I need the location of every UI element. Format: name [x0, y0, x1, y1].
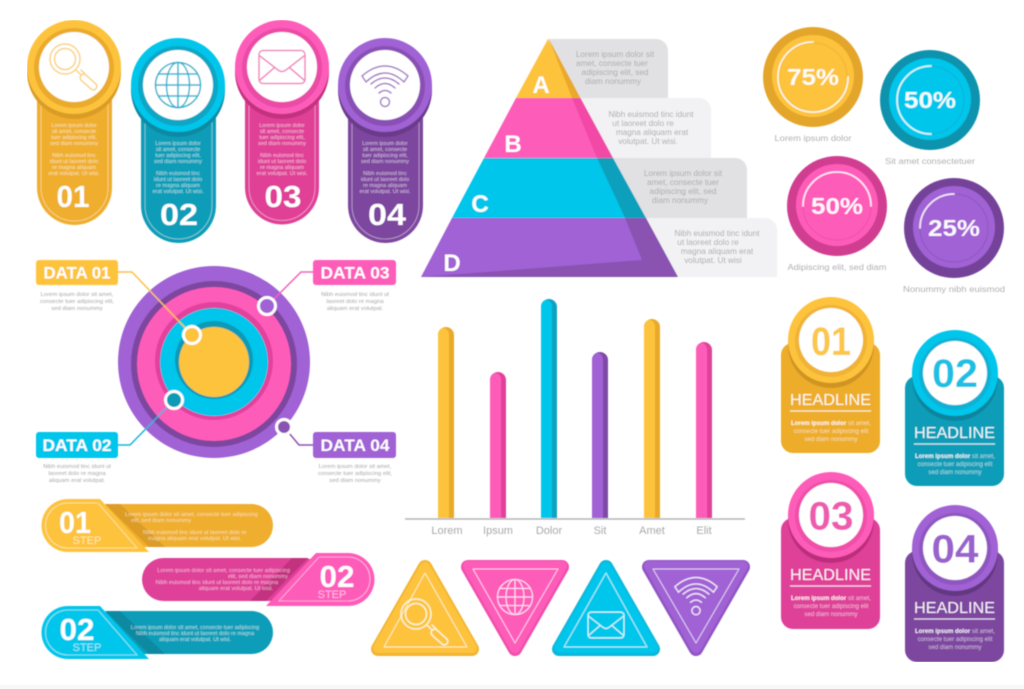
triangle: wifi: [649, 566, 743, 649]
callout: data 03: laoreet dolo re magna: [326, 299, 384, 305]
pill 01 text: tuer adipiscing elit,: [51, 135, 97, 141]
step 03 banner: [41, 606, 273, 659]
pill 01 text: idunt ut laoreet dolo: [50, 159, 98, 165]
pyramid text: amet, consecte tuer: [647, 178, 719, 187]
callout: data 01: [36, 260, 200, 344]
bar dolor: [541, 299, 557, 518]
gauge 50% pink: [787, 156, 887, 256]
card 03: Lorem ipsum dolor sit amet,: [791, 595, 871, 602]
pill 04 text: sed diam nonummy: [361, 159, 409, 165]
card 01: consecte tuer adipiscing elit: [794, 428, 869, 435]
callout: data 02: laoreet dolo re magna: [48, 471, 106, 477]
card 03: sed diam nonummy: [804, 611, 859, 618]
card 04: sed diam nonummy: [928, 644, 983, 651]
axis labels: [431, 525, 712, 537]
step 03 banner: aliquam erat volutpat. Ut wisi.: [159, 637, 231, 643]
step 01 banner: [41, 499, 273, 552]
callout: data 01: DATA 01: [44, 264, 110, 282]
card 01: 01: [811, 320, 851, 364]
callout: data 01: sed diam nonummy: [51, 306, 103, 312]
step 01 banner: 01: [59, 505, 91, 540]
pill 02 text: Nibh euismod tinc: [156, 171, 200, 177]
pill 01: [27, 20, 121, 225]
pill 02 text: sed diam nonummy: [154, 159, 202, 165]
gauge 25%: [904, 178, 1004, 278]
pill 02: [131, 38, 225, 243]
pill 01 text: Lorem ipsum dolor: [51, 123, 97, 129]
pyramid letters: [443, 72, 550, 277]
pyramid text: ut laoreet dolo re: [677, 238, 739, 247]
card 03: HEADLINE: [790, 567, 871, 584]
pill 01 number: 01: [56, 179, 90, 214]
bar ipsum: [490, 372, 506, 518]
card 04: HEADLINE: [914, 600, 995, 617]
pill 03 text: sit amet, consecte: [260, 129, 304, 135]
gauge 50% cyan label: Sit amet consectetuer: [885, 157, 975, 166]
step 01 banner: elit, sed diam nonummy: [131, 518, 191, 524]
pyramid letters: C: [471, 191, 489, 218]
pill 02 text: idunt ut laoreet dolo: [154, 177, 202, 183]
callout: data 04: consecte tuer adipiscing elit,: [318, 471, 392, 477]
triangle: search: [378, 567, 472, 649]
axis: [405, 518, 745, 520]
card 04: [905, 505, 1004, 662]
panel: pyramid: [421, 39, 777, 277]
pill 03: [235, 20, 329, 225]
callout: data 04: Lorem ipsum dolor sit amet,: [319, 464, 392, 470]
callout: data 02: [36, 392, 182, 484]
triangle: envelope: [559, 567, 653, 649]
concentric rings: [118, 266, 310, 458]
pill 04 text: Lorem ipsum dolor: [362, 141, 408, 147]
card 01: Lorem ipsum dolor sit amet,: [791, 420, 871, 427]
pyramid text: adipiscing elit, sed: [650, 187, 717, 196]
callout: data 04: sed diam nonummy: [329, 478, 381, 484]
callout: data 03: Nibh euismod tinc idunt ut: [321, 292, 389, 298]
callout: data 03: aliquam erat volutpat.: [327, 306, 384, 312]
pyramid letters: D: [443, 250, 461, 277]
step 03 banner: Nibh euismod tinc idunt ut laoreet dolo re magna: [136, 631, 255, 637]
pill 02 text: sit amet, consecte: [156, 147, 200, 153]
icon: envelope: [259, 50, 305, 84]
pyramid text: amet, consecte tuer: [576, 59, 648, 68]
pyramid text: adipiscing elit, sed: [582, 68, 649, 77]
step 02 banner: Lorem ipsum dolor sit amet, consecte tuer adipiscing: [157, 568, 290, 574]
gauge 50% pink label: Adipiscing elit, sed diam: [788, 263, 887, 272]
panel: step banners: [41, 499, 374, 659]
callout: data 02: Nibh euismod tinc idunt ut: [43, 464, 111, 470]
pyramid text: magna aliquam erat: [681, 247, 754, 256]
step 02 banner: STEP: [318, 589, 346, 601]
card 02: sed diam nonummy: [928, 469, 983, 476]
pill 01 text: sed diam nonummy: [50, 141, 98, 147]
pill 01 text: re magna aliquam: [52, 165, 96, 171]
pill 03 text: sed diam nonummy: [258, 141, 306, 147]
step 02 banner: aliquam erat volutpat. Ut wisi.: [199, 586, 273, 592]
card 01: sed diam nonummy: [804, 436, 859, 443]
card 02: [905, 330, 1004, 486]
gauge 50% cyan: 50%: [904, 87, 956, 113]
gauge 50% cyan: [880, 50, 980, 150]
bar sit: [592, 352, 608, 518]
pyramid text: Nibh euismod tinc idunt: [674, 229, 760, 238]
pyramid text: volutpat. Ut wisi: [684, 256, 742, 265]
gauge 25%: 25%: [928, 215, 980, 241]
pill 01 text: sit amet, consecte: [52, 129, 96, 135]
card 04: consecte tuer adipiscing elit: [918, 636, 993, 643]
pill 04 text: re magna aliquam: [363, 183, 407, 189]
panel: headline cards: [781, 297, 1004, 662]
panel: triangle icons: [378, 566, 743, 649]
callout: data 01: consecte tuer adipiscing elit,: [40, 299, 114, 305]
card 02: 02: [932, 352, 978, 396]
pill 03 text: re magna aliquam: [260, 165, 304, 171]
pyramid text: ut laoreet dolo re: [612, 119, 674, 128]
pyramid text: Lorem ipsum dolor sit: [644, 169, 723, 178]
triangle: globe: [468, 566, 562, 649]
icon: magnifier: [50, 44, 98, 91]
step 01 banner: STEP: [73, 535, 101, 547]
bar elit: [696, 342, 712, 518]
pill 01 text: erat volutpat. Ut wisi.: [48, 171, 100, 177]
callout: data 04: [276, 420, 396, 484]
axis labels: Amet: [639, 525, 665, 537]
panel: percentage circles: [763, 27, 1006, 294]
pyramid text: Nibh euismod tinc idunt: [608, 110, 694, 119]
pill 03 number: 03: [264, 179, 302, 214]
bar amet: [644, 319, 660, 518]
pill 04 text: idunt ut laoreet dolo: [361, 177, 409, 183]
panel: bar chart: [405, 299, 745, 537]
pyramid text: magna aliquam erat: [616, 128, 689, 137]
pyramid text boxes: [548, 39, 777, 277]
step 01 banner: Lorem ipsum dolor sit amet, consecte tuer adipiscing: [125, 512, 258, 518]
step 03 banner: 02: [60, 612, 94, 647]
pyramid text: [576, 50, 760, 265]
axis labels: Sit: [594, 525, 606, 537]
pill 04 text: tuer adipiscing elit,: [362, 153, 408, 159]
pill 03 text: Lorem ipsum dolor: [259, 123, 305, 129]
step 01 banner: Nibh euismod tinc idunt ut laoreet dolo re: [143, 530, 246, 536]
callout: data 02: DATA 02: [42, 437, 112, 455]
callout: data 01: Lorem ipsum dolor sit amet,: [41, 292, 114, 298]
pyramid layers: [421, 39, 678, 277]
card 04: 04: [932, 528, 979, 572]
icon: wifi: [362, 66, 408, 106]
pyramid letters: A: [532, 72, 550, 99]
axis labels: Lorem: [431, 525, 463, 537]
pill 02 text: Lorem ipsum dolor: [155, 141, 201, 147]
callout: data 03: [258, 260, 396, 314]
card 01: [781, 297, 880, 453]
gauge 75%: [763, 27, 863, 127]
pill 04 text: erat volutpat. Ut wisi.: [359, 189, 411, 195]
step 02 banner: [142, 553, 374, 606]
pill 03 text: idunt ut laoreet dolo: [258, 159, 306, 165]
bar lorem: [438, 327, 454, 518]
axis labels: Dolor: [536, 525, 562, 537]
pyramid text: volutpat. Ut wisi.: [618, 137, 678, 146]
callout: data 03: DATA 03: [320, 264, 390, 282]
gauge 75% label: Lorem ipsum dolor: [774, 134, 852, 143]
card 03: consecte tuer adipiscing elit: [794, 603, 869, 610]
pill 03 text: tuer adipiscing elit,: [259, 135, 305, 141]
panel: target diagram: [36, 260, 396, 484]
card 02: consecte tuer adipiscing elit: [918, 461, 993, 468]
pill 02 text: erat volutpat. Ut wisi.: [152, 189, 204, 195]
gauge 75%: 75%: [787, 64, 839, 90]
step 02 banner: 02: [320, 559, 354, 594]
pill 02 number: 02: [160, 197, 198, 232]
step 03 banner: STEP: [73, 642, 101, 654]
pill 04 text: Nibh euismod tinc: [363, 171, 407, 177]
pill 04 number: 04: [368, 197, 407, 232]
card 01: HEADLINE: [790, 392, 871, 409]
step 02 banner: Nibh euismod tinc idunt ut laoreet dolo re magna: [156, 580, 279, 586]
pill 02 text: re magna aliquam: [156, 183, 200, 189]
card 04: Lorem ipsum dolor sit amet,: [915, 628, 995, 635]
axis labels: Elit: [696, 525, 712, 537]
step 01 banner: magna aliquam erat volutpat. Ut wisi.: [148, 536, 242, 542]
callout: data 02: aliquam erat volutpat.: [49, 478, 106, 484]
callout: data 04: DATA 04: [320, 437, 390, 455]
pill 04: [338, 38, 432, 243]
pill 04 text: sit amet, consecte: [363, 147, 407, 153]
axis labels: Ipsum: [483, 525, 513, 537]
card 03: 03: [808, 494, 854, 538]
icon: globe: [156, 62, 200, 108]
pyramid letters: B: [504, 131, 522, 158]
panel: numbered pills: [27, 20, 432, 243]
pill 01 text: Nibh euismod tinc: [52, 153, 96, 159]
card 03: [781, 472, 880, 629]
gauge 50% pink: 50%: [811, 193, 863, 219]
card 02: Lorem ipsum dolor sit amet,: [915, 453, 995, 460]
step 02 banner: elit, sed diam nonummy: [228, 574, 288, 580]
pill 02 text: tuer adipiscing elit,: [155, 153, 201, 159]
gauge 25% label: Nonummy nibh euismod: [903, 285, 1006, 294]
step 03 banner: Lorem ipsum dolor sit amet, consecte tuer adipiscing: [131, 625, 259, 631]
pyramid text: diam nonummy: [585, 77, 642, 86]
pyramid text: diam nonummy: [652, 196, 709, 205]
pyramid text: Lorem ipsum dolor sit: [576, 50, 655, 59]
pill 03 text: erat volutpat. Ut wisi.: [256, 171, 308, 177]
card 02: HEADLINE: [914, 425, 995, 442]
pill 03 text: Nibh euismod tinc: [260, 153, 304, 159]
